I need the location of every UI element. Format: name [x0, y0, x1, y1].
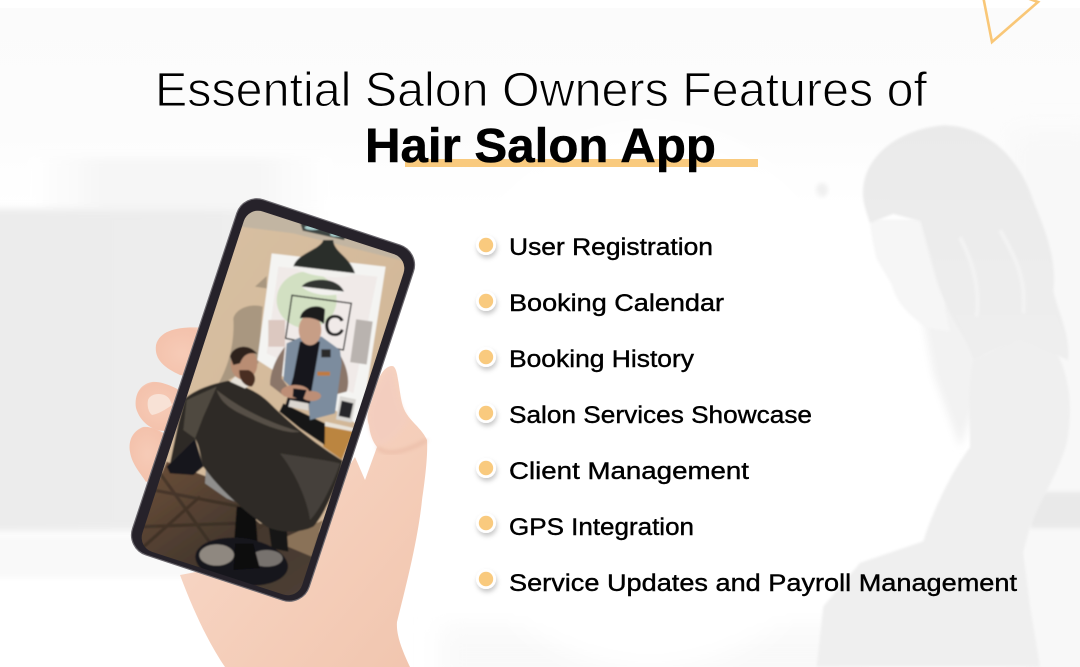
- lamp 2: [302, 280, 344, 295]
- barber chair: [194, 470, 289, 586]
- lamp 1: [293, 240, 355, 277]
- window sign: [286, 295, 351, 350]
- item: User Registration: User Registration: [509, 234, 713, 261]
- counter top: [324, 422, 355, 432]
- title line 1: Essential Salon Owners Features of: [155, 64, 928, 117]
- finger 1: [156, 327, 215, 380]
- background: white fade behind list: [425, 130, 875, 667]
- phone body: [126, 193, 420, 607]
- feature list: [476, 234, 1017, 597]
- fingernail: [148, 394, 172, 415]
- window frame: [257, 253, 386, 427]
- seated client: [230, 347, 257, 388]
- thumb tip shading: [369, 370, 408, 445]
- phone screen photo: [142, 210, 404, 596]
- hand holding phone: [130, 327, 427, 667]
- barber cape: [167, 381, 343, 532]
- hair: [863, 125, 1069, 360]
- title underline: [405, 159, 758, 167]
- window view: [267, 267, 377, 393]
- decorative triangle: [983, 0, 1038, 42]
- counter: [323, 423, 354, 459]
- neck: [920, 303, 987, 447]
- ceiling: [242, 210, 402, 260]
- title line 2: Hair Salon App: [365, 120, 716, 173]
- wall shadow: [217, 305, 263, 387]
- floor: [142, 461, 320, 596]
- flight case: [336, 396, 356, 423]
- item: Booking Calendar: Booking Calendar: [509, 290, 724, 317]
- salon wall: [159, 226, 404, 534]
- palm and thumb: [180, 366, 427, 667]
- item: GPS Integration: GPS Integration: [509, 514, 694, 541]
- title: [155, 64, 928, 173]
- face: [870, 219, 950, 331]
- finger 3: [130, 427, 170, 482]
- phone: [130, 198, 416, 602]
- finger 2: [136, 382, 190, 431]
- item: Salon Services Showcase: Salon Services Showcase: [509, 402, 812, 429]
- background: woman silhouette: [817, 125, 1070, 667]
- standing barber: [270, 306, 348, 445]
- phone notch: [300, 224, 346, 240]
- phone screen photo: C: [324, 311, 344, 343]
- thumb crease: [377, 440, 427, 452]
- item: Service Updates and Payroll Management: Service Updates and Payroll Management: [509, 570, 1017, 597]
- item: Client Management: Client Management: [509, 458, 749, 485]
- sweater: [817, 335, 1070, 667]
- item: Booking History: Booking History: [509, 346, 694, 373]
